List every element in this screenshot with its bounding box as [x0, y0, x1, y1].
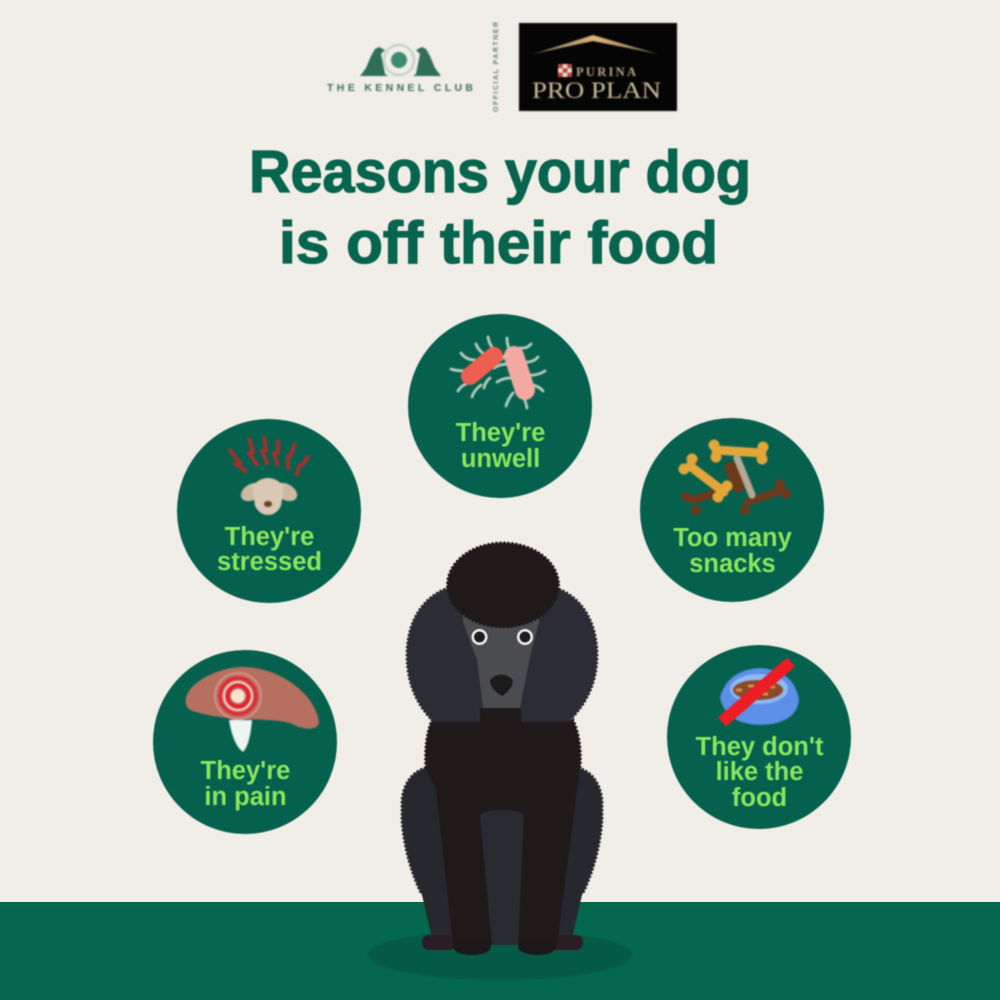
- icon: bacteria: [451, 337, 545, 408]
- Purina wordmark: PURINA: [576, 65, 636, 79]
- wordmark: THE KENNEL CLUB: [327, 82, 473, 94]
- nose: [490, 674, 513, 696]
- icon: dog head: [238, 478, 300, 515]
- body: [426, 720, 580, 945]
- label: They're: [456, 419, 545, 447]
- label: They're: [201, 757, 290, 785]
- official partner label: OFFICIAL PARTNER: [493, 22, 500, 112]
- dark bones: [682, 468, 790, 514]
- logo: Purina Pro Plan: [519, 23, 677, 111]
- panel: they don't like the food: [667, 645, 851, 829]
- icon: left seated dog: [360, 47, 388, 76]
- label: They're: [225, 523, 314, 551]
- panel: too many snacks: [640, 418, 824, 602]
- panel: they're stressed: [177, 419, 361, 603]
- chin: [480, 708, 521, 722]
- icon: sore joint: [186, 667, 319, 752]
- icon: roof: [533, 35, 658, 54]
- front paws: [453, 939, 556, 955]
- panel: they're in pain: [153, 650, 337, 834]
- Pro Plan wordmark: PRO PLAN: [532, 78, 661, 104]
- icon: crossed-out food bowl: [720, 662, 799, 725]
- pale bone: [737, 458, 752, 495]
- panel: they're unwell: [408, 314, 592, 498]
- label: food: [732, 784, 787, 812]
- label: in pain: [204, 783, 287, 811]
- logo: The Kennel Club: [327, 45, 473, 94]
- icon: crest: [384, 45, 414, 75]
- left ear: [407, 588, 500, 722]
- outer legs: [402, 768, 602, 938]
- right eye: [517, 629, 533, 645]
- face: [463, 612, 540, 708]
- title: Reasons your dog: [249, 139, 751, 205]
- label: like the: [716, 758, 803, 786]
- illustration: black poodle: [402, 543, 602, 955]
- label: snacks: [689, 550, 776, 578]
- icon: right seated dog: [413, 47, 441, 76]
- topknot: [448, 543, 558, 627]
- icon: bones: [679, 440, 790, 514]
- right ear: [500, 588, 597, 722]
- left eye: [472, 629, 488, 645]
- title: [249, 139, 751, 276]
- label: stressed: [217, 548, 322, 576]
- outer paws: [422, 935, 583, 950]
- label: They don't: [696, 733, 823, 761]
- icon: stress bolts: [229, 436, 309, 476]
- title: is off their food: [279, 210, 718, 276]
- label: unwell: [461, 445, 540, 473]
- centre leg gap: [480, 810, 524, 945]
- ground band: [0, 902, 1000, 1000]
- ground shadow: [368, 930, 632, 980]
- icon: checkerboard: [558, 64, 572, 77]
- label: Too many: [673, 524, 792, 552]
- orange bones: [679, 440, 768, 502]
